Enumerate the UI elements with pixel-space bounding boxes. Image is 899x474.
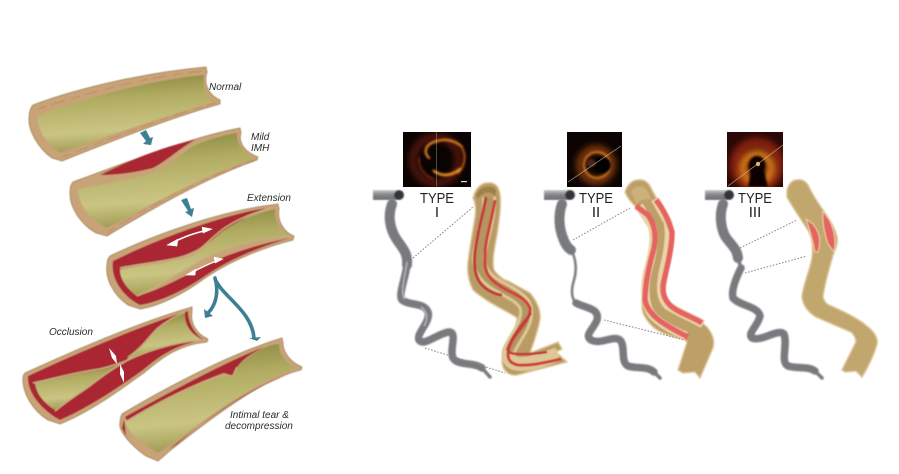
angiogram artery: type I: [390, 204, 490, 377]
catheter: type II: [544, 190, 575, 200]
panel: type III: [705, 132, 877, 378]
arrow: normal to mild: [140, 130, 153, 145]
OCT image: type I: [403, 132, 471, 187]
type label: III: III: [749, 204, 761, 221]
arrows: branch to occlusion and tear: [204, 278, 261, 341]
vessel: extension: [107, 204, 294, 309]
OCT image: type II: [567, 132, 622, 187]
label: intimal tear and decompression: Intimal tear &: [230, 410, 289, 421]
vessel: occlusion: [23, 307, 208, 424]
panel: type II: [544, 132, 714, 378]
arrows: blood extension: [167, 227, 223, 275]
label: intimal tear and decompression: [225, 410, 293, 432]
connector lines: type III: [740, 220, 807, 273]
vessel illustration: type III: [787, 180, 877, 377]
type label: III: TYPE: [738, 190, 772, 207]
vessel: mild IMH: [70, 128, 258, 236]
panel: type I: [373, 132, 567, 377]
label: mild IMH: IMH: [251, 143, 270, 154]
angiogram artery: type II: [559, 204, 660, 378]
type label: I: [420, 190, 454, 221]
connector lines: type II: [573, 208, 685, 340]
label: intimal tear and decompression: decompression: [225, 421, 293, 432]
type label: II: II: [592, 204, 600, 221]
vessel: normal: [29, 67, 220, 161]
type label: II: TYPE: [579, 190, 613, 207]
type label: III: [738, 190, 772, 221]
arrows: occlusion compression: [109, 348, 124, 383]
type label: II: [579, 190, 613, 221]
OCT image: type III: [727, 132, 783, 187]
label: mild IMH: Mild: [251, 132, 270, 143]
vessel illustration: type II: [625, 180, 714, 378]
catheter: type I: [373, 190, 404, 200]
figure: intramural hematoma progression and OCT types: [22, 66, 878, 462]
type label: I: I: [435, 204, 439, 221]
type label: I: TYPE: [420, 190, 454, 207]
arrow: mild to extension: [181, 198, 194, 217]
vessel illustration: type I: [468, 183, 567, 375]
angiogram artery: type III: [721, 204, 822, 378]
label: mild IMH: [251, 132, 270, 154]
label: normal: Normal: [209, 82, 242, 93]
label: extension: Extension: [247, 193, 291, 204]
label: occlusion: Occlusion: [49, 327, 93, 338]
vessel: intimal tear and decompression: [120, 338, 302, 461]
catheter: type III: [705, 190, 734, 200]
connector lines: type I: [413, 207, 505, 373]
